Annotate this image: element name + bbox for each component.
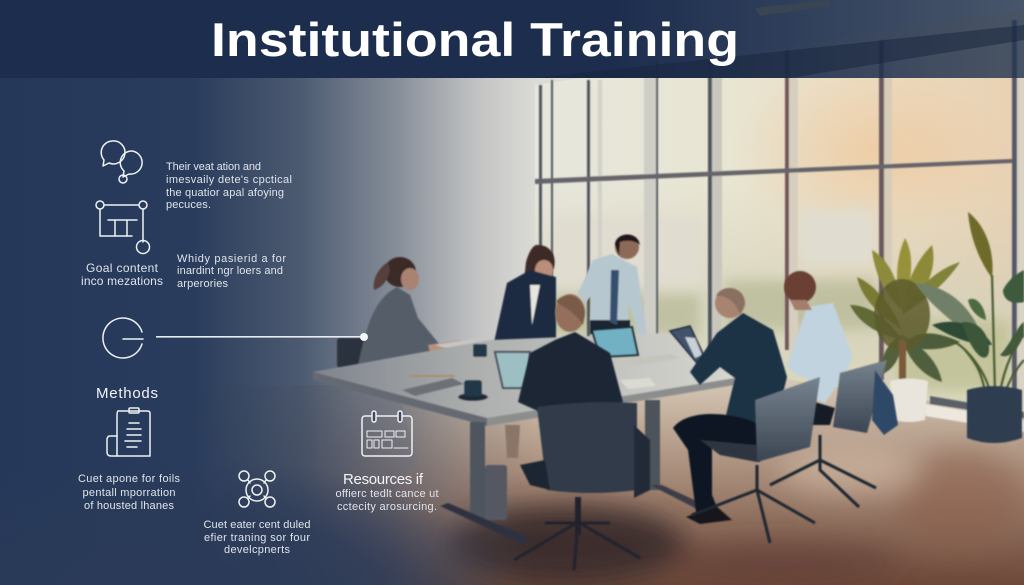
header band [0,0,1024,78]
text block: methods description [78,473,180,512]
text block: intro: the quatior apal afoying [166,187,284,199]
text block: intro: imesvaily dete's cpctical [166,174,292,186]
laptops on table [495,326,705,388]
window frames [535,20,1024,432]
icon: chat bubbles [101,141,142,183]
text block: goal content: Goal content [86,261,159,275]
man seated with tablet [673,288,787,524]
text block: resources description: cctecity arosurcing. [337,501,437,513]
text block: goal content [81,261,163,288]
heading: methods: Methods [96,385,158,402]
text block: resources description [336,488,438,513]
heading: resources: Resources if [343,471,424,488]
plant right, dark pot [915,212,1024,443]
text block: center description: develcpnerts [224,544,290,556]
text block: goal content: inco mezations [81,274,163,288]
title: Institutional Training [211,13,739,66]
connector line with dot [156,333,368,341]
icon: network wheel [239,471,275,507]
text block: description: inardint ngr loers and [177,265,283,277]
text block: intro: pecuces. [166,199,211,211]
icon: calendar [362,411,412,456]
woman seated at left [337,257,484,470]
text block: center description: Cuet eater cent duled [204,519,310,531]
icon: meeting table network [96,201,150,254]
text block: methods description: Cuet apone for foils [78,473,180,485]
text block: methods description: pentall mporration [82,487,176,499]
text block: resources description: offierc tedlt cance ut [336,488,438,500]
man seated in light shirt [784,271,853,425]
meeting table [313,333,735,544]
text block: description: Whidy pasierid a for [177,253,286,265]
office chairs at right [692,360,898,543]
text block: center description [204,519,310,556]
woman standing with dark jacket [493,245,556,347]
icon: circular gauge [103,318,143,358]
text block: description: arperories [177,278,228,290]
text block: intro: Their veat ation and [166,161,261,173]
navy left gradient overlay [0,70,535,585]
icon: clipboard [107,408,150,456]
man standing with tie [578,234,658,346]
text block: intro [166,161,292,211]
text block: center description: efier traning sor four [204,532,310,544]
text block: description [177,253,286,290]
text block: methods description: of housted lhanes [84,500,174,512]
chair in front [514,402,650,570]
man seated with back to camera [505,294,623,458]
plant left, white pot [850,238,960,422]
